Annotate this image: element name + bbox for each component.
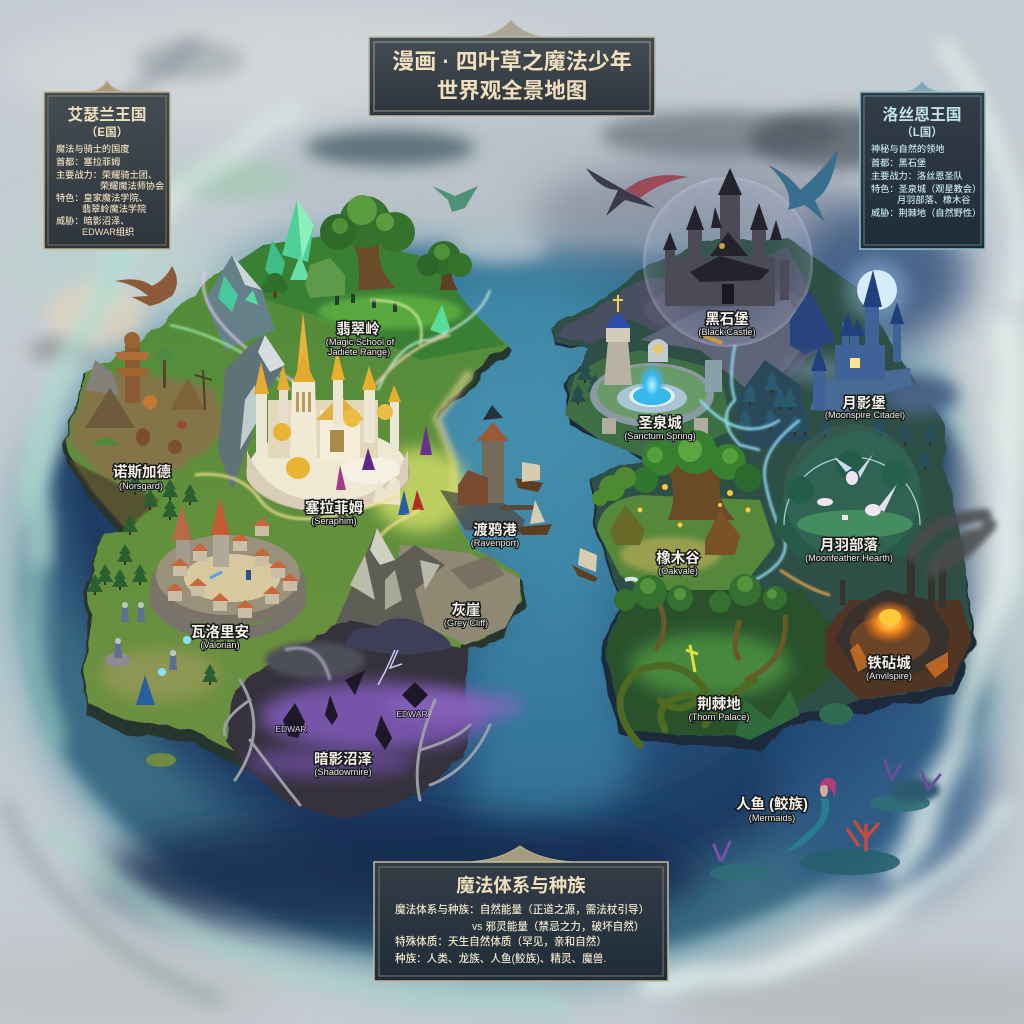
dead trees: [224, 680, 490, 805]
label: EDWAR right: EDWAR: [396, 709, 428, 719]
ships: [515, 478, 543, 492]
panel details: 种族：人类、龙族、人鱼(鲛族)、精灵、魔兽.: [395, 952, 606, 965]
icon: brown dragon: [115, 266, 177, 306]
students: [335, 294, 397, 312]
lightning: [378, 650, 402, 685]
region: Jadeite Range: [170, 195, 505, 390]
kingdom details: 翡翠岭魔法学院: [82, 203, 146, 214]
ocean: [0, 190, 1024, 990]
label: Sanctum Spring: (Sanctum Spring): [624, 431, 696, 441]
wizards: [336, 465, 346, 490]
region: Moonspire Citadel: [783, 258, 958, 415]
region: Sanctum Spring: [565, 295, 732, 460]
kingdom details: 首都：黑石堡: [871, 157, 926, 168]
Norsgard dirt ground: [68, 370, 225, 480]
fountain: [629, 385, 675, 407]
warriors: [136, 421, 187, 454]
kingdom details: 荣耀魔法师协会: [100, 180, 164, 191]
label: Jadeite Range: Jadiete Range): [328, 347, 390, 357]
icon: mermaid: [785, 778, 836, 852]
label: Grey Cliff: [444, 602, 488, 628]
tree huts: [610, 505, 645, 545]
gold domes: [273, 423, 291, 441]
kingdom heading: [882, 106, 962, 139]
icon: green dragon: [432, 186, 478, 212]
label: Black Castle: 黑石堡: [705, 311, 749, 328]
label: Jadeite Range: 翡翠岭: [336, 320, 380, 338]
title text: [392, 49, 632, 103]
wall ring: [590, 363, 714, 427]
thorny vines: [620, 666, 755, 745]
towers: [254, 350, 401, 452]
kingdom details: EDWAR组织: [82, 226, 134, 237]
mountains between Jadeite and Seraphim: [218, 335, 285, 490]
title text: 世界观全景地图: [437, 79, 587, 103]
kingdom details: 威胁：荆棘地（自然野性）: [871, 207, 981, 218]
label: Black Castle: (Black Castle): [698, 327, 756, 337]
label: Moonfeather Hearth: 月羽部落: [820, 536, 878, 554]
label: Anvilspire: [866, 654, 912, 681]
label: Moonfeather Hearth: [805, 536, 893, 563]
gate arch: [648, 339, 668, 362]
islet: [146, 753, 176, 767]
label: Valorian: 瓦洛里安: [191, 624, 249, 641]
region: Seraphim white castle: [246, 312, 432, 515]
label: Jadeite Range: [326, 320, 395, 357]
label: Shadowmire: [314, 750, 372, 777]
label: Mermaids: 人鱼 (鲛族): [736, 795, 808, 813]
region: Norsgard camp: [85, 332, 212, 454]
storm cloud: [345, 618, 451, 654]
panel details: vs 邪灵能量（禁忌之力，破坏自然）: [472, 920, 644, 933]
panel: Arthuran kingdom: [44, 81, 170, 249]
kingdom details: 特色：圣泉城（观星教会）: [871, 183, 981, 194]
icon: dark red-winged dragon: [586, 168, 688, 216]
kingdom heading: 洛丝恩王国: [882, 106, 962, 124]
label: Thorn Palace: [689, 695, 749, 722]
region: Grey Cliff: [335, 528, 520, 650]
knights: [105, 602, 177, 670]
kingdom details: [56, 143, 164, 237]
label: Thorn Palace: 荆棘地: [697, 695, 741, 713]
region: Moonfeather Hearth: [775, 424, 925, 560]
pegasus and unicorns: [817, 454, 897, 520]
region: Black Castle: [640, 168, 813, 400]
region: Valorian walled city: [87, 474, 306, 705]
main keep: [268, 400, 378, 458]
region: Anvilspire forge: [780, 515, 990, 700]
panel heading: 魔法体系与种族: [456, 875, 586, 896]
label: Mermaids: (Mermaids): [749, 813, 795, 823]
kingdom details: 神秘与自然的领地: [871, 143, 944, 154]
kingdom details: 威胁：暗影沼泽、: [56, 215, 130, 226]
label: Anvilspire: 铁砧城: [867, 654, 911, 672]
kingdom heading: （L国）: [901, 125, 943, 139]
kingdom heading: （E国）: [86, 125, 128, 139]
label: Ravenport: [471, 521, 519, 548]
region: Shadowmire: [224, 618, 525, 818]
label: Ravenport: 渡鸦港: [473, 521, 517, 539]
icon: totem: [115, 332, 150, 403]
blue pine forest and river: [690, 345, 938, 620]
region: Thorn Palace: [605, 574, 835, 745]
label: Mermaids: [736, 795, 808, 823]
icon: great oak and trees: [262, 195, 472, 298]
label: Sanctum Spring: 圣泉城: [638, 414, 682, 432]
dome: [643, 177, 813, 347]
label: Valorian: [191, 624, 249, 650]
kingdom heading: [68, 106, 146, 139]
castle body: [665, 195, 789, 306]
region: Oakvale: [592, 430, 775, 598]
label: Norsgard: [113, 463, 171, 491]
label: Grey Cliff: 灰崖: [452, 602, 480, 619]
label: Thorn Palace: (Thorn Palace): [689, 712, 749, 722]
label: Shadowmire: 暗影沼泽: [314, 750, 372, 768]
label: Ravenport: (Ravenport): [471, 538, 519, 548]
label: Grey Cliff: (Grey Cliff): [444, 618, 488, 628]
region: Mermaid reef: [710, 760, 940, 882]
kingdom details: 主要战力：洛丝恩圣队: [871, 170, 963, 181]
islet: [819, 703, 853, 725]
label: Seraphim: [305, 499, 363, 526]
label: Sanctum Spring: [624, 414, 696, 441]
kingdom details: 主要战力：荣耀骑士团、: [56, 169, 157, 180]
title panel: [369, 20, 655, 116]
label: Anvilspire: (Anvilspire): [866, 671, 912, 681]
label: Norsgard: 诺斯加德: [113, 463, 171, 481]
kingdom details: 魔法与骑士的国度: [56, 143, 130, 154]
coral: [848, 822, 878, 850]
label: Oakvale: (Oakvale): [658, 566, 698, 576]
label: Oakvale: 橡木谷: [656, 550, 700, 567]
label: Seraphim: 塞拉菲姆: [305, 499, 363, 517]
label: Oakvale: [656, 550, 700, 576]
kingdom details: 特色：皇家魔法学院、: [56, 192, 148, 203]
western continent landmass: [63, 240, 523, 815]
label: Moonfeather Hearth: (Moonfeather Hearth): [805, 553, 893, 563]
golden road: [195, 474, 420, 555]
coastal glow: [100, 372, 470, 701]
label: Moonspire Citadel: 月影堡: [842, 394, 886, 412]
label: Moonspire Citadel: (Moonspire Citadel): [825, 410, 905, 420]
map labels: [113, 311, 912, 823]
region: Ravenport: [440, 405, 598, 582]
right tower and telescope: [705, 360, 722, 392]
icon: blue dragon: [768, 150, 838, 222]
label: EDWAR left: EDWAR: [275, 724, 307, 734]
shadow figures: [283, 670, 428, 750]
panel details: 特殊体质：天生自然体质（罕见，亲和自然）: [395, 935, 607, 948]
panel: Lothern kingdom: [860, 81, 985, 249]
title text: 漫画 · 四叶草之魔法少年: [392, 49, 632, 74]
eastern north island: [550, 240, 975, 750]
mana ribbons: [170, 270, 490, 390]
tower: [604, 340, 632, 385]
kingdom details: 月羽部落、橡木谷: [897, 194, 970, 205]
kingdom heading: 艾瑟兰王国: [68, 106, 146, 124]
panel: magic system and races: [374, 846, 668, 981]
gate: [373, 475, 400, 505]
label: Jadeite Range: (Magic School of: [326, 337, 395, 347]
mountain: [205, 255, 275, 350]
icon: school building: [305, 258, 345, 298]
smoke: [912, 515, 990, 572]
panel details: [395, 903, 649, 965]
label: Valorian: (Valorian): [200, 640, 240, 650]
kingdom details: [871, 143, 981, 218]
label: Shadowmire: (Shadowmire): [314, 767, 372, 777]
label: Moonspire Citadel: [825, 394, 905, 420]
kingdom details: 首都：塞拉菲姆: [56, 156, 120, 167]
icon: jade crystals: [218, 200, 450, 335]
label: Norsgard: (Norsgard): [119, 481, 163, 491]
cliff shading: [70, 460, 160, 530]
label: Seraphim: (Seraphim): [311, 516, 357, 526]
icon: tents: [85, 388, 135, 428]
panel details: 魔法体系与种族：自然能量（正道之源，需法杖引导）: [395, 903, 649, 916]
label: Black Castle: [698, 311, 756, 337]
